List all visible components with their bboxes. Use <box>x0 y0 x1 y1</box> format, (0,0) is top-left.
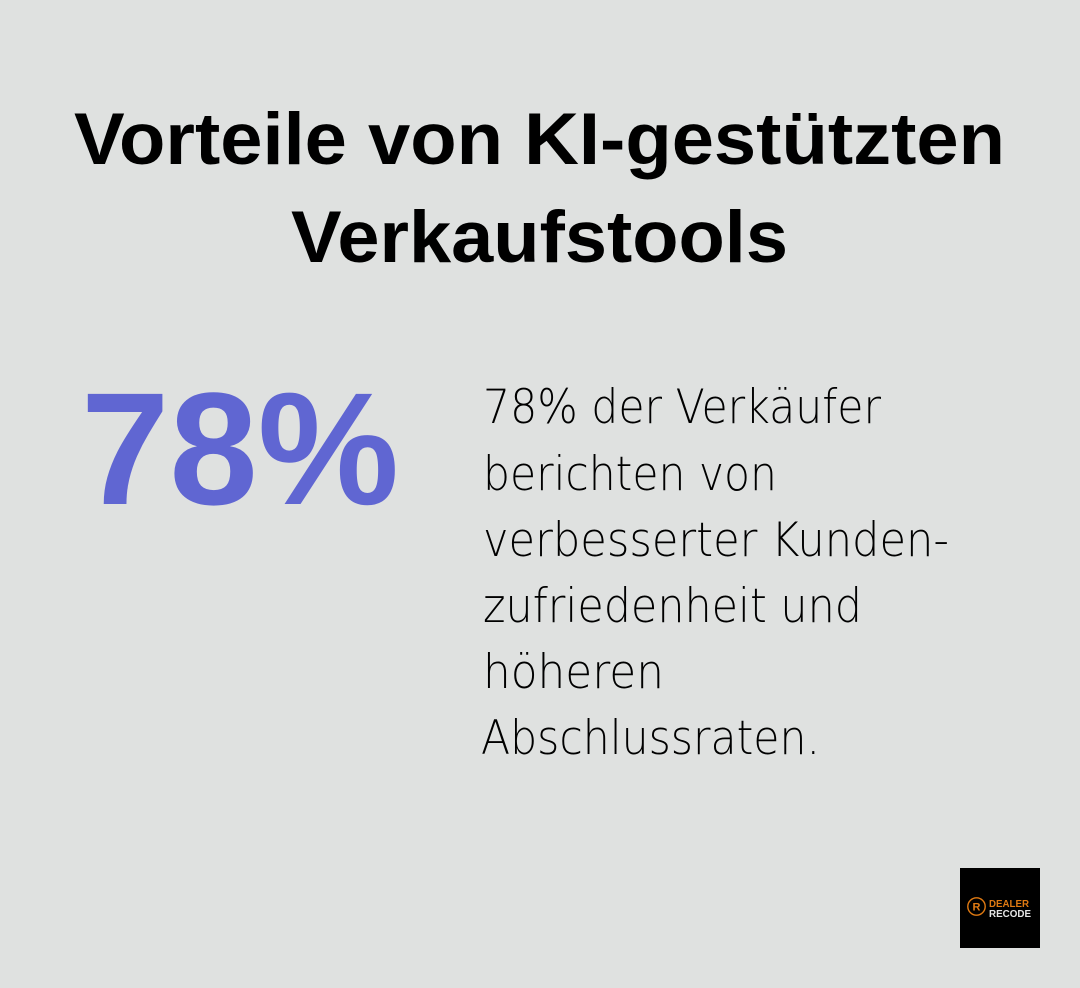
big statistic: 78%: 78% <box>81 359 399 538</box>
description text: 78% der Verkäufer <box>483 380 882 435</box>
description text <box>481 380 949 766</box>
description text: höheren <box>483 645 664 700</box>
logo wordmark: RECODE <box>989 908 1031 920</box>
logo wordmark: DEALER <box>989 898 1029 910</box>
title <box>74 99 1005 278</box>
title: Verkaufstools <box>291 197 788 278</box>
icon: R in orange ring: R <box>973 902 981 914</box>
description text: verbesserter Kunden- <box>483 513 949 568</box>
logo wordmark <box>989 898 1031 920</box>
title: Vorteile von KI-gestützten <box>74 99 1005 180</box>
description text: Abschlussraten. <box>481 711 820 766</box>
description text: berichten von <box>483 447 777 502</box>
logo: Dealer Recode <box>960 868 1040 948</box>
description text: zufriedenheit und <box>483 579 862 634</box>
